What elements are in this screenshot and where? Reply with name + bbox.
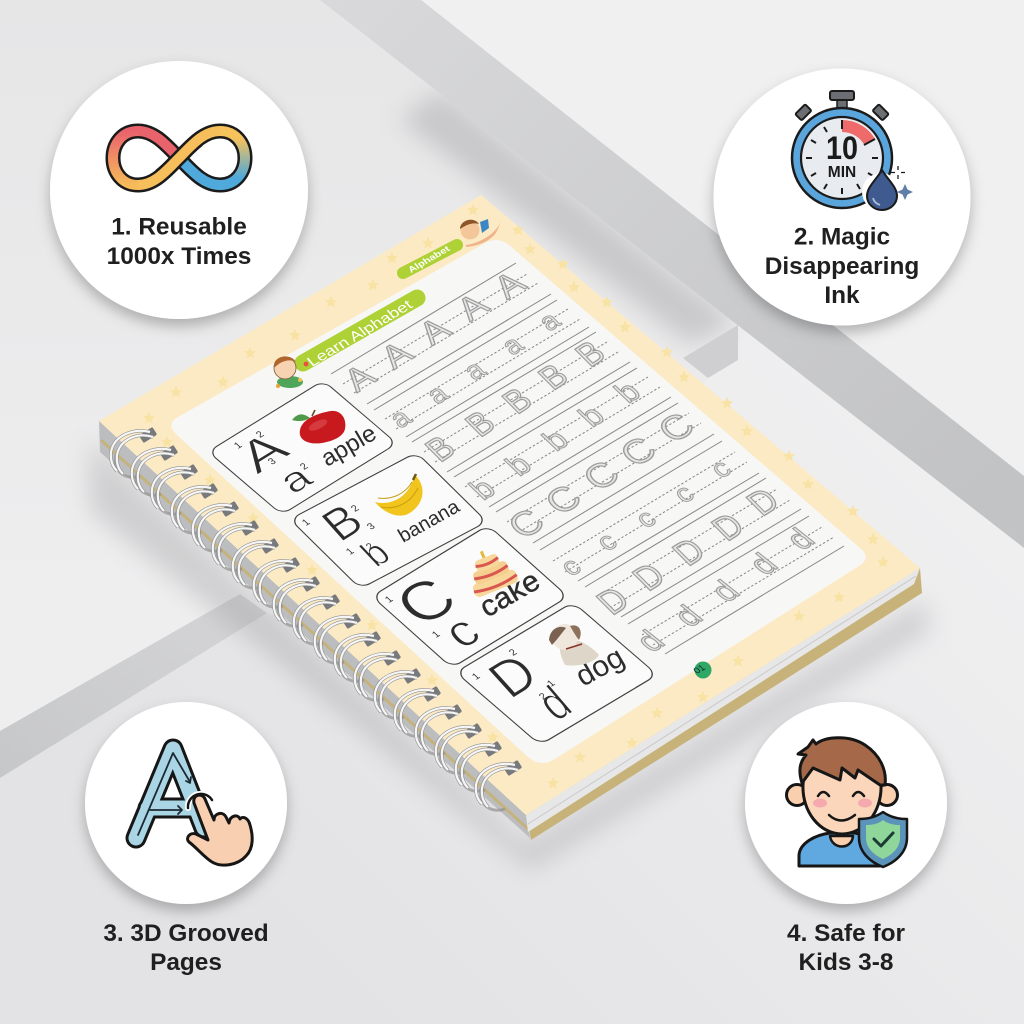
tracing lines (331, 263, 844, 654)
alphabet card C: 1 (430, 629, 443, 640)
alphabet card B: 1 (344, 546, 357, 557)
tracing letters row a: a (532, 306, 567, 336)
alphabet card D (456, 602, 657, 745)
icon: grooved letter A with finger (136, 749, 252, 865)
alphabet card C: cake (474, 564, 546, 624)
alphabet card A: apple (316, 420, 381, 472)
alphabet card C: 1 (383, 594, 396, 605)
label 3: 3. 3D Grooved (103, 920, 269, 947)
tracing letters row d (628, 523, 823, 658)
tracing letters row c: c (629, 504, 662, 533)
tracing letters row a: a (495, 330, 530, 360)
callout 4: child safe (745, 702, 947, 976)
alphabet card C: c (432, 606, 491, 658)
alphabet card D: 1 (545, 678, 558, 689)
tracing letters row A: A (336, 357, 383, 399)
alphabet card B: banana (394, 495, 464, 547)
alphabet card A: a (269, 457, 321, 501)
book spine and page edges (99, 421, 922, 840)
tracing letters row b: b (535, 423, 576, 457)
tracing letters row B: B (495, 382, 541, 421)
alphabet card A (208, 380, 397, 515)
icon: dog (549, 624, 599, 666)
alphabet card B: B (312, 495, 374, 551)
icon: cake (461, 542, 519, 598)
tracing letters row D (589, 481, 788, 622)
tracing letters row A: A (411, 310, 458, 352)
callout 2: magic ink: Disappearing (765, 253, 919, 280)
tracing letters row A (336, 264, 533, 399)
tracing letters row A: A (486, 264, 533, 306)
icon: apple (292, 410, 345, 443)
tracing letters row a: a (383, 403, 418, 433)
alphabet card B: b (352, 532, 399, 574)
tracing letters row C: C (612, 430, 665, 474)
page number badge: 01 (691, 663, 707, 675)
tracing letters row c: c (554, 552, 587, 581)
icon: stopwatch with ink drop: 10 (826, 130, 858, 166)
tracing letters row c: c (590, 527, 623, 556)
tracing letters row b: b (498, 448, 539, 482)
tracing letters row D: D (704, 506, 753, 548)
tracing letters row C: C (500, 502, 553, 546)
banner: Alphabet (403, 244, 457, 274)
cover stars (143, 204, 889, 788)
tracing letters row B: B (531, 358, 577, 397)
tracing letters row d: d (778, 523, 823, 556)
callout 2: magic ink (714, 68, 970, 326)
tracing letters row D: D (665, 531, 714, 573)
alphabet card A: 3 (266, 456, 279, 467)
alphabet card B (290, 452, 487, 589)
tracing letters row C: C (537, 478, 590, 522)
tracing letters row b: b (462, 472, 503, 506)
alphabet card B: 3 (365, 521, 378, 532)
tracing letters row A: A (373, 334, 420, 376)
book shadow (90, 440, 930, 870)
tracing letters row C: C (575, 454, 628, 498)
alphabet card D: dog (570, 641, 630, 693)
callout 3: grooved pages (85, 702, 287, 976)
label 1: 1. Reusable (111, 214, 247, 240)
alphabet card D: D (477, 643, 550, 709)
alphabet card D: d (526, 676, 582, 731)
alphabet card D: 2 (507, 647, 520, 658)
tracing letters row d: d (666, 600, 711, 633)
icon: stopwatch with ink drop: MIN (828, 164, 856, 181)
yellow cover (99, 195, 920, 815)
page number badge (691, 662, 712, 678)
alphabet card C: C (380, 565, 471, 637)
alphabet card B: 2 (349, 503, 362, 514)
tracing letters row c: c (667, 479, 700, 508)
icon: smiling boy with shield (786, 738, 907, 867)
alphabet card B: 2 (364, 541, 377, 552)
alphabet card A: 1 (232, 440, 245, 451)
alphabet card D: 2 (537, 691, 550, 702)
callout 2: magic ink: Ink (824, 282, 860, 309)
tracing letters row a: a (457, 355, 492, 385)
tracing letters row a (383, 306, 567, 433)
alphabet card B: 1 (300, 517, 313, 528)
tracing letters row B: B (418, 430, 464, 469)
alphabet card C (372, 525, 568, 668)
tracing letters row b (462, 375, 648, 506)
kid illustration on hand, top corner (460, 219, 501, 247)
tracing letters row d: d (741, 548, 786, 581)
tracing letters row d: d (628, 625, 673, 658)
alphabet card A: 2 (298, 461, 311, 472)
label 2: 2. Magic (794, 224, 890, 250)
tracing letters row d: d (703, 575, 748, 608)
tracing letters row c: c (704, 454, 737, 483)
tracing letters row C (500, 406, 703, 546)
alphabet card A: A (227, 422, 299, 483)
tracing letters row B: B (458, 405, 504, 444)
tracing letters row c (554, 454, 737, 581)
banner: Learn Alphabet: Learn Alphabet (304, 297, 417, 370)
callout 1: reusable: 1000x Times (107, 243, 251, 270)
tracing letters row D: D (589, 580, 638, 622)
tracing letters row a: a (420, 379, 455, 409)
tracing letters row B: B (568, 335, 614, 374)
tracing letters row b: b (571, 399, 612, 433)
banner: Alphabet: Alphabet (406, 244, 452, 274)
tracing letters row B (418, 335, 614, 469)
icon: infinity loop (113, 131, 245, 185)
spiral notebook (99, 195, 922, 840)
tracing letters row A: A (449, 286, 496, 328)
callout 4: child safe: Kids 3-8 (799, 949, 893, 976)
white page panel (171, 240, 866, 763)
alphabet card D: 1 (470, 671, 483, 682)
spiral binding rings (111, 427, 522, 810)
label 4: 4. Safe for (787, 920, 905, 947)
callout 3: grooved pages: Pages (150, 949, 222, 976)
kid illustration near banner (274, 356, 303, 388)
icon: banana (375, 474, 423, 516)
tracing letters row C: C (650, 406, 703, 450)
tracing letters row D: D (625, 556, 674, 598)
alphabet card A: 2 (254, 429, 267, 440)
tracing letters row b: b (607, 375, 648, 409)
tracing letters row D: D (739, 481, 788, 523)
icon: stopwatch with ink drop (792, 91, 913, 211)
callout 1: reusable (50, 61, 308, 319)
